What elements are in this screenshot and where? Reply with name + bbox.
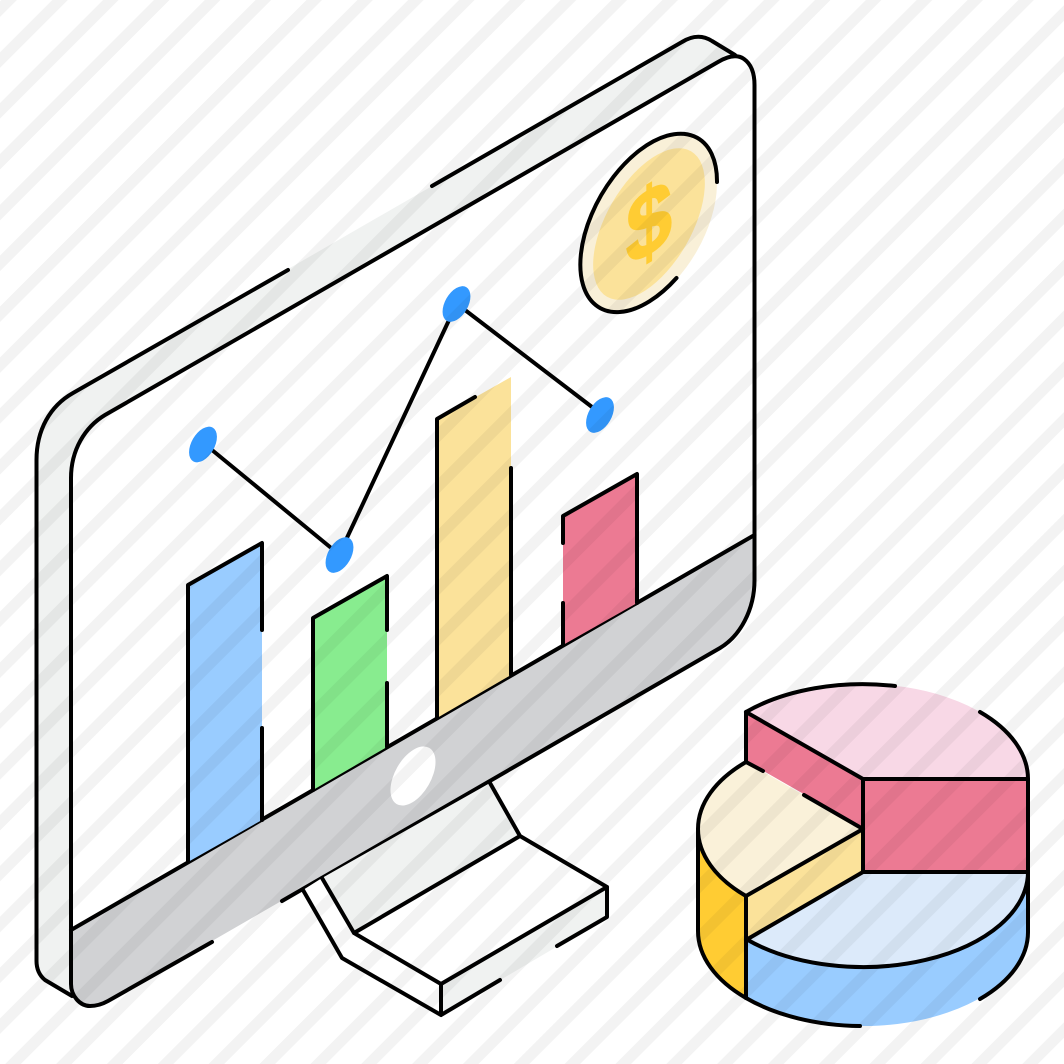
home button — [381, 739, 445, 813]
pie chart — [698, 684, 1028, 1026]
monitor chin — [71, 535, 754, 1006]
cream top slice — [698, 762, 863, 896]
red side walls — [746, 712, 1028, 872]
trend points — [183, 281, 620, 578]
monitor stand — [303, 783, 607, 1015]
stand neck — [322, 783, 520, 933]
stand outlines — [303, 783, 607, 1015]
bar: green — [313, 576, 387, 790]
stand base side — [441, 887, 607, 1015]
blue outer wall — [746, 872, 1028, 1026]
trend line — [212, 310, 592, 547]
stand left strip — [303, 878, 441, 1015]
pie outlines — [698, 684, 1028, 1026]
monitor back frame — [36, 37, 754, 1006]
bar: red — [563, 474, 637, 645]
coin outline — [580, 134, 717, 312]
coin rim — [553, 112, 745, 336]
yellow side wall — [746, 829, 863, 940]
orange outer wall — [698, 829, 746, 998]
bar: yellow — [437, 377, 511, 718]
coin face — [570, 130, 728, 318]
bar: blue — [188, 543, 262, 862]
monitor — [36, 37, 754, 1006]
dollar sign: $ — [626, 156, 672, 289]
monitor outlines — [36, 37, 754, 1006]
line chart and bars — [183, 281, 637, 862]
pink top slice — [746, 684, 1028, 779]
light blue top slice — [746, 872, 1028, 967]
icon: dollar coin — [553, 112, 745, 336]
monitor screen — [71, 56, 754, 931]
